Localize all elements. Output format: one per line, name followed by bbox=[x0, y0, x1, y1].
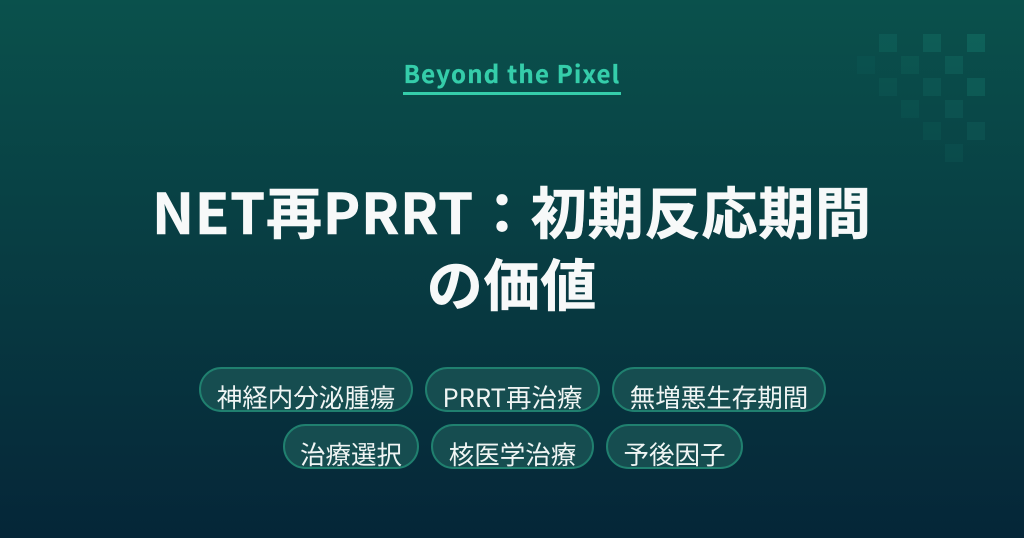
decorative square pattern bbox=[879, 34, 985, 140]
tag: 神経内分泌腫瘍 bbox=[199, 367, 413, 412]
title: の価値 bbox=[427, 242, 597, 323]
brand label: Beyond the Pixel: Beyond the Pixel bbox=[404, 55, 620, 90]
tag: 神経内分泌腫瘍: 神経内分泌腫瘍 bbox=[217, 378, 395, 415]
title bbox=[152, 170, 872, 323]
tag: PRRT再治療 bbox=[425, 367, 600, 412]
tag: 治療選択 bbox=[283, 424, 419, 469]
tag: 核医学治療: 核医学治療 bbox=[449, 435, 576, 472]
title: NET再PRRT：初期反応期間 bbox=[152, 170, 872, 251]
tag: 治療選択: 治療選択 bbox=[300, 435, 402, 472]
tag: 無増悪生存期間 bbox=[612, 367, 826, 412]
tag: 予後因子 bbox=[606, 424, 743, 469]
tag: PRRT再治療: PRRT再治療 bbox=[443, 378, 582, 415]
tag: 核医学治療 bbox=[431, 424, 594, 469]
tag: 無増悪生存期間: 無増悪生存期間 bbox=[630, 378, 808, 415]
tag: 予後因子: 予後因子 bbox=[623, 435, 726, 472]
